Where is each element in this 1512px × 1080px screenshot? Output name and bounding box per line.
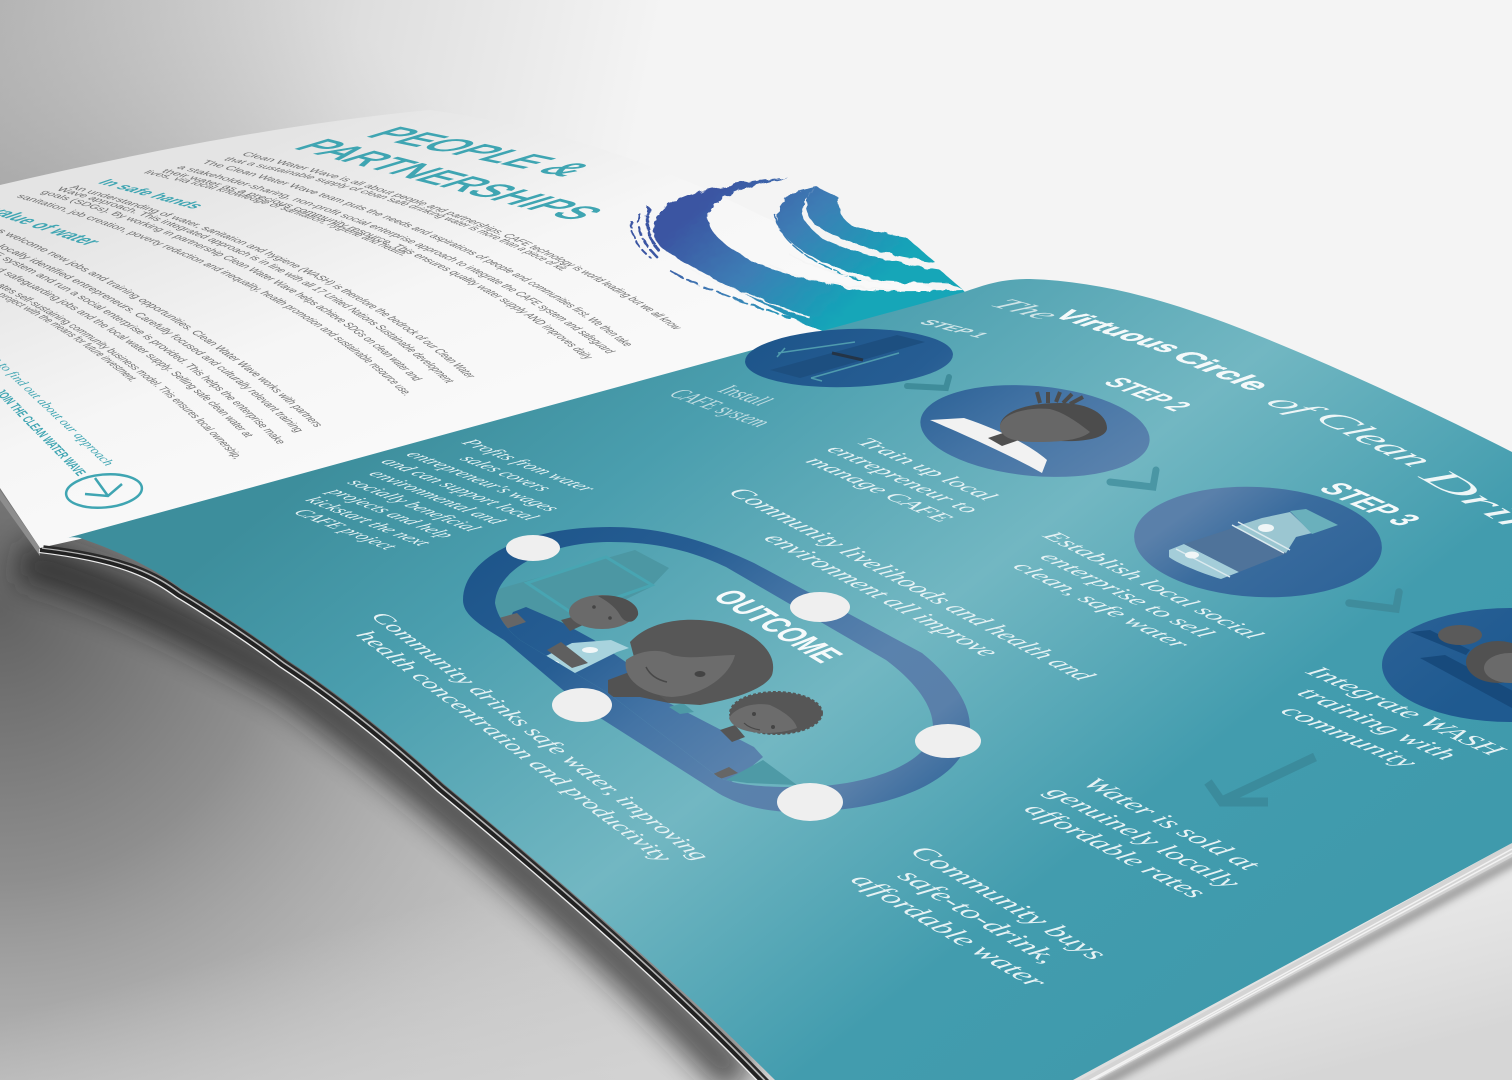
caption: community buys: safe-to-drink, [890,867,1066,967]
text block: WASH paragraph: Wave approach. This integrated approach is in line with all 17 United Nations Sustainable development [58,186,454,384]
chevron [907,377,949,388]
white brush streaks [692,255,900,318]
text block: intro paragraph: The Clean Water Wave team puts the needs and aspirations of people and communities first. We then take [204,160,631,346]
panel: left page [0,114,965,556]
person right [720,692,822,742]
caption: community drinks: Community drinks safe water, improving [365,609,715,863]
bodies [500,607,763,790]
icon: entrepreneur head [988,392,1107,446]
person centre hair and face [608,620,773,705]
title: the virtuous circle of clean drinking water: Clean [1303,407,1447,470]
group of people [490,550,822,790]
panel: right page [67,279,1512,1080]
heading: people and partnerships: PEOPLE & [355,123,605,179]
title: the virtuous circle of clean drinking water [980,296,1512,677]
caption: water sold: genuinely locally [1039,783,1248,892]
title: the virtuous circle of clean drinking water: The [980,296,1070,322]
caption: water sold: Water is sold at [1075,774,1268,874]
caption: profits: kickstart the next [300,495,437,548]
caption: livelihoods: environment all improve [757,531,1007,659]
text block: WASH paragraph: sanitation, job creation, poverty reduction and inequality, health promotion and sustainable resource use. [17,194,409,396]
arrow: down-left [1208,757,1315,802]
label: outcome: OUTCOME [703,585,851,667]
label: STEP 2 [1096,374,1199,414]
heading: people and partnerships [283,123,616,224]
circle [1382,608,1512,722]
caption: clean, safe water [1006,560,1195,651]
text block: intro paragraph: lives, via local knowledge of sanitation, hygiene and health. [144,170,406,256]
text block: intro paragraph: that a sustainable supply of clean safe drinking water is more than a piece of kit. [224,157,567,271]
caption: profits: socially beneficial [341,477,486,534]
teal page sheet [67,279,1512,1080]
caption: community drinks: health concentration and productivity [350,628,678,865]
caption: water sold: affordable rates [1017,800,1213,902]
caption: Install [711,381,779,409]
bottle in hand [546,640,629,673]
caption: community [1273,703,1425,771]
title: the virtuous circle of clean drinking water: of [1254,393,1336,420]
text block: intro paragraph: a stakeholder-sharing, non-profit social enterprise approach to integrate the CAFE system and safeguard [177,166,616,354]
track dots [506,535,981,821]
shadow under brochure [20,560,1512,1080]
text block: intro paragraph: Clean Water Wave is all about people and partnerships. CAFE technology is world leading but we all know [243,152,681,329]
icon: coat [930,418,1047,473]
caption: profits: and can support local [375,457,544,522]
water unit behind people [495,550,669,623]
caption: profits: CAFE project [287,507,403,552]
caption: enterprise to sell [1033,550,1220,640]
heading: people and partnerships: PARTNERSHIPS [283,135,616,224]
circle [917,376,1153,486]
chevron [1110,470,1156,487]
step 2: train entrepreneur [797,374,1199,526]
text block: WASH paragraph: An understanding of water, sanitation and hygiene (WASH) is therefore the bedrock of our Clean Water [69,186,474,378]
legs [669,703,797,785]
step 1: install CAFE system [663,318,995,430]
page stack: lower right edge [1073,843,1512,1080]
caption: profits: sales covers [454,454,557,493]
label: STEP 3 [1310,479,1430,529]
caption: entrepreneur to [820,443,985,516]
caption: manage CAFE [799,454,958,525]
step 4: WASH training [1282,608,1512,766]
caption: profits: projects and help [320,486,460,540]
icon: trainees [1410,625,1512,708]
outcome illustration [463,527,981,821]
caption: community buys: affordable water [843,871,1054,991]
trousers [499,613,738,779]
caption: Establish local social [1036,529,1269,642]
brush splatter [632,208,860,318]
page stack: lower left edge [39,546,774,1080]
title: the virtuous circle of clean drinking water: Virtuous [1046,307,1192,355]
caption: profits: environmental and [363,469,511,526]
track ring [463,527,970,812]
title: the virtuous circle of clean drinking water: Circle [1163,348,1279,394]
chevron [1349,592,1399,609]
caption: profits: Profits from water [455,437,601,494]
page sheet [0,110,1010,548]
caption: training with [1290,685,1464,763]
icon: circled arrow [65,471,143,511]
caption: CAFE system [663,385,778,430]
heading: in safe hands: In safe hands [93,177,210,210]
caption: Train up local [850,435,1003,503]
caption: Integrate WASH [1298,663,1512,759]
caption: livelihoods: Community livelihoods and health and [721,485,1103,684]
page edges [0,490,40,556]
circle [1131,481,1385,603]
wave graphic [632,177,980,335]
circle [744,325,954,391]
step 3: establish social enterprise [983,479,1430,662]
text block: WASH paragraph: goals (SDGs). By working in partnership Clean Water Wave helps achieve SDGs on clean water and [40,190,423,381]
caption: community buys: Community buys [903,842,1114,964]
caption: profits: entrepreneur's wages [400,449,565,514]
icon: CAFE unit [770,335,925,381]
icon: water bottle [1169,509,1338,579]
person left [561,595,638,631]
label: STEP 1 [914,318,995,339]
text block: intro paragraph: their water as a precious community resource. This ensures quality water supply AND improves daily [162,169,592,358]
